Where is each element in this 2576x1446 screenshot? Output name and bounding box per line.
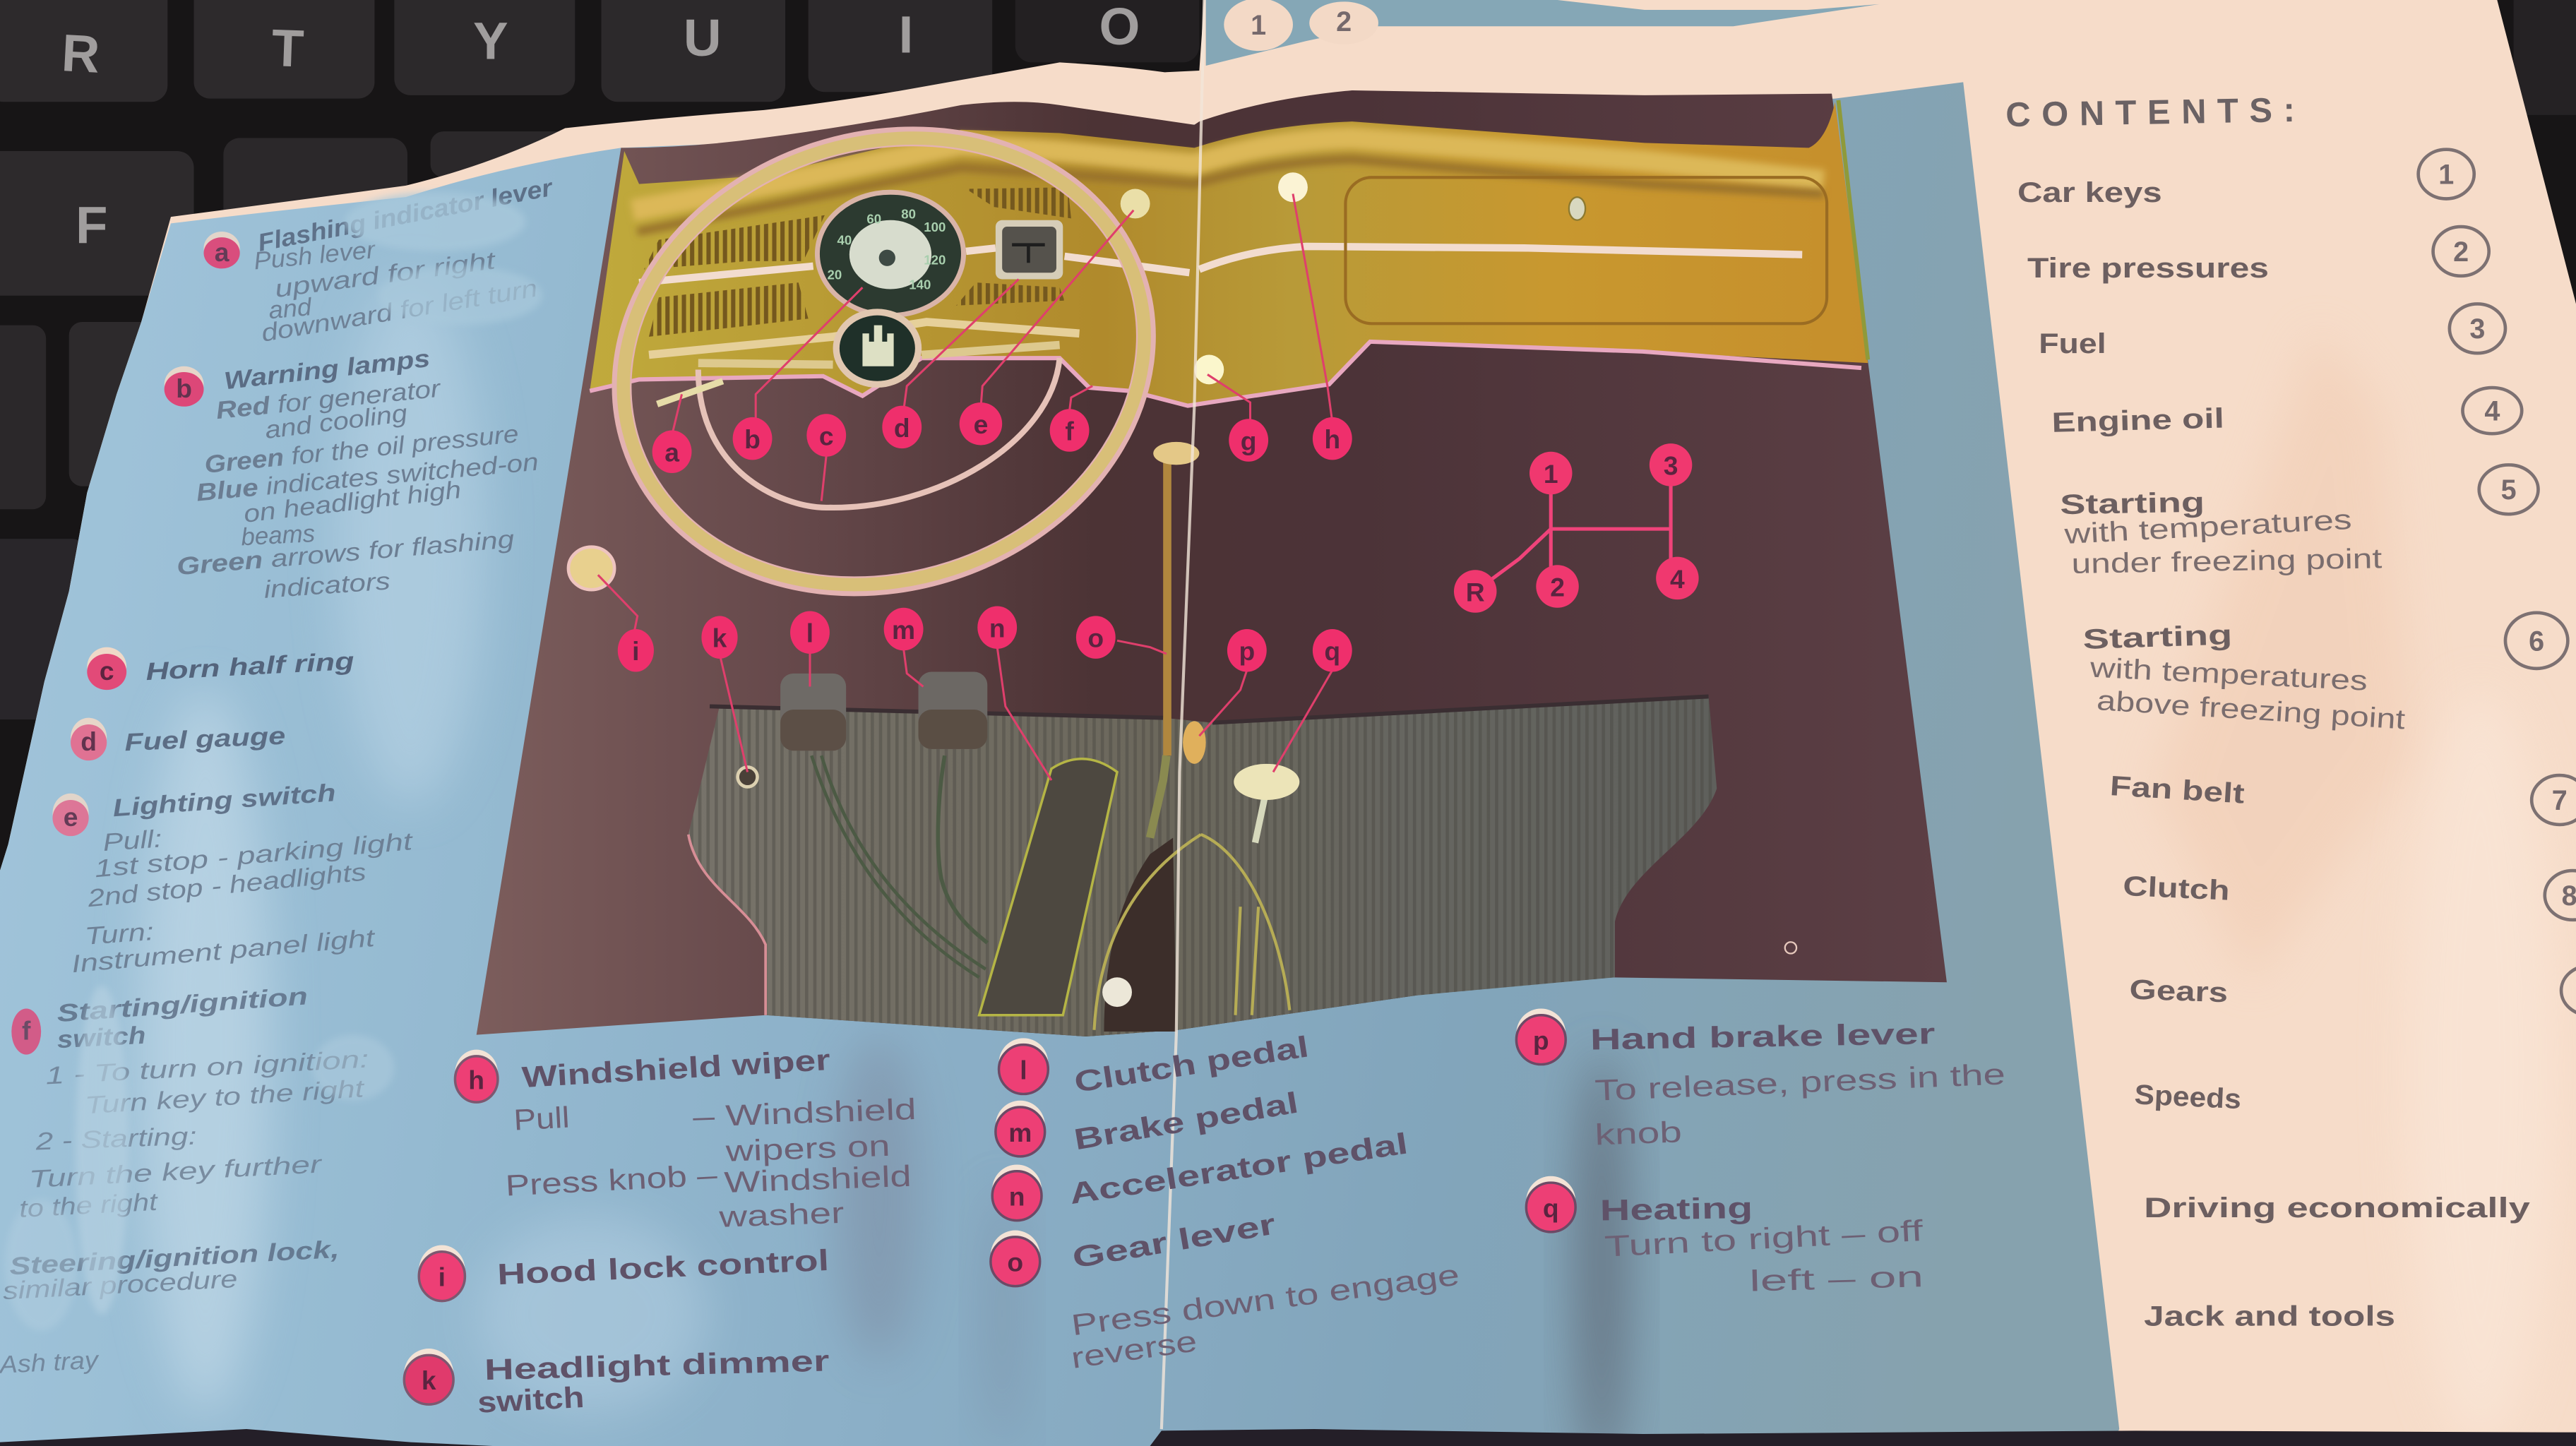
legend f: starting ignition switch: similar procedure <box>2 1265 238 1305</box>
item: fan belt <box>2109 770 2576 825</box>
legend m: brake pedal: Brake pedal <box>1072 1086 1301 1156</box>
top tab with page markers: 2 <box>1336 6 1352 37</box>
legend o: gear lever <box>991 1207 1461 1375</box>
item: starting under freezing: Starting <box>2060 487 2205 520</box>
callout markers on the diagram: i <box>632 636 640 666</box>
legend o: gear lever: reverse <box>1069 1324 1199 1375</box>
item: car keys: Car keys <box>2017 177 2162 208</box>
legend l: clutch pedal: Clutch pedal <box>1072 1029 1311 1099</box>
legend i: hood lock control: i <box>439 1262 446 1292</box>
ignition knob <box>1194 355 1224 384</box>
edge line <box>1838 100 1868 359</box>
legend p: hand brake lever: knob <box>1594 1115 1683 1152</box>
panel: left legend a to g <box>0 174 556 1379</box>
panel: lower legend p and q <box>1516 1008 2006 1298</box>
legend k: headlight dimmer switch <box>404 1344 830 1419</box>
legend b: warning lamps: on headlight high <box>242 476 463 528</box>
legend n: accelerator pedal: n <box>1009 1182 1025 1212</box>
hand brake <box>1094 721 1289 1030</box>
mat stud <box>738 767 758 787</box>
paper fold line <box>1162 0 1204 1429</box>
item: starting under freezing <box>2060 465 2538 580</box>
keyboard background: F <box>76 196 108 254</box>
keyboard background: U <box>684 8 722 67</box>
panel: lower legend h to k <box>404 1043 917 1419</box>
callout markers on the diagram: g <box>1241 426 1257 455</box>
panel: contents <box>2005 91 2576 1332</box>
item: engine oil <box>2051 388 2522 438</box>
item: tire pressures <box>2027 227 2489 284</box>
item: starting under freezing: under freezing point <box>2071 543 2383 580</box>
callout markers on the diagram: o <box>1087 623 1104 653</box>
item: starting above freezing: Starting <box>2082 619 2233 655</box>
speedometer: 80 <box>901 206 916 221</box>
dashboard upper dark band <box>638 160 1823 232</box>
legend b: warning lamps <box>165 345 539 604</box>
legend b: warning lamps: Green arrows for flashing <box>176 525 515 580</box>
legend h: windshield wiper: Pull <box>513 1101 571 1137</box>
callout markers on the diagram: b <box>744 424 761 454</box>
callout markers on the diagram: e <box>974 410 988 439</box>
legend n: accelerator pedal <box>992 1126 1410 1221</box>
legend h: windshield wiper <box>455 1043 917 1233</box>
legend p: hand brake lever: Hand brake lever <box>1590 1017 1936 1056</box>
item: clutch <box>2122 871 2576 920</box>
speedometer: 100 <box>924 220 946 234</box>
clutch pedal <box>780 674 986 977</box>
legend b: warning lamps: and cooling <box>263 400 409 444</box>
legend q: heating: q <box>1543 1193 1559 1223</box>
legend a: flashing indicator: Push lever <box>253 236 377 275</box>
item: engine oil: Engine oil <box>2051 402 2224 438</box>
legend a: flashing indicator: and <box>268 293 314 324</box>
legend b: warning lamps: indicators <box>263 567 391 604</box>
speedometer: 40 <box>837 233 852 248</box>
gas pedal stem highlight <box>1102 977 1132 1007</box>
item: gears: Gears <box>2129 974 2229 1008</box>
item: car keys: 1 <box>2438 160 2454 191</box>
legend d: fuel gauge: Fuel gauge <box>124 722 286 756</box>
callout markers on the diagram: l <box>806 619 813 648</box>
item: fan belt: 7 <box>2552 785 2568 816</box>
callout markers on the diagram: m <box>892 615 915 645</box>
gear shift diagram: 2 <box>1550 573 1565 602</box>
legend p: hand brake lever: To release, press in the <box>1594 1057 2006 1107</box>
speedometer: 140 <box>909 277 931 292</box>
gear shift diagram: 4 <box>1670 564 1685 594</box>
heater knob <box>1234 764 1299 842</box>
chrome dash strip <box>639 246 1802 282</box>
legend h: windshield wiper: h <box>468 1065 484 1094</box>
accelerator pedal <box>979 759 1117 1015</box>
contents heading: CONTENTS: <box>2005 91 2295 134</box>
legend n: accelerator pedal: Accelerator pedal <box>1067 1126 1410 1210</box>
legend f: starting ignition switch: f <box>22 1016 31 1046</box>
legend c: horn half ring: c <box>100 656 114 686</box>
item: starting under freezing: with temperatures <box>2063 504 2353 550</box>
legend k: headlight dimmer switch: k <box>422 1366 436 1395</box>
legend h: windshield wiper: wipers on <box>724 1129 890 1168</box>
legend f: starting ignition switch: to the right <box>18 1188 159 1223</box>
legend q: heating <box>1526 1176 1924 1298</box>
legend e: lighting switch: Pull: <box>102 825 163 856</box>
legend h: windshield wiper: – Windshield <box>692 1092 917 1133</box>
legend f: starting ignition switch: 1 - To turn on ignition: <box>45 1046 369 1089</box>
steering wheel rim <box>565 72 1203 651</box>
floor stud right <box>1785 942 1796 954</box>
item: fan belt: Fan belt <box>2109 770 2246 810</box>
speaker grille: right upper <box>966 187 1071 218</box>
legend p: hand brake lever: p <box>1533 1026 1549 1056</box>
gear shift diagram <box>1454 443 1699 613</box>
legend a: flashing indicator: upward for right <box>273 246 498 303</box>
legend b: warning lamps: Red for generator <box>215 375 443 424</box>
speaker grille: left lower <box>649 282 809 337</box>
legend b: warning lamps: b <box>176 374 192 403</box>
legend i: hood lock control <box>419 1243 830 1301</box>
legend f: starting ignition switch: 2 - Starting: <box>35 1123 197 1156</box>
legend k: headlight dimmer switch: switch <box>477 1380 585 1419</box>
panel: lower legend l to o <box>991 1029 1461 1375</box>
item: fuel <box>2039 304 2505 359</box>
callout markers on the diagram: q <box>1324 636 1340 666</box>
keyboard background: I <box>899 5 913 64</box>
legend h: windshield wiper: Windshield <box>724 1159 912 1199</box>
dashboard upper light band <box>633 138 1823 210</box>
legend f: starting ignition switch: Turn the key further <box>28 1150 323 1193</box>
legend c: horn half ring: Horn half ring <box>145 647 355 686</box>
spokes and horn bar <box>698 345 1060 364</box>
legend e: lighting switch: 2nd stop - headlights <box>85 858 367 912</box>
callout markers on the diagram: d <box>894 413 910 443</box>
gear shift diagram: 3 <box>1664 450 1678 480</box>
horn half ring <box>698 358 1060 508</box>
item: jack and tools: Jack and tools <box>2144 1301 2395 1332</box>
speedometer: 120 <box>924 253 946 268</box>
item: starting above freezing <box>2082 613 2568 735</box>
keyboard background: Y <box>473 12 508 71</box>
leader lines <box>598 194 1332 780</box>
callout markers on the diagram: c <box>819 421 834 450</box>
legend c: horn half ring <box>87 647 355 690</box>
speaker grille: right lower <box>956 282 1065 306</box>
glove box knob <box>1569 197 1585 220</box>
legend a: flashing indicator: downward for left turn <box>259 275 539 347</box>
keyboard background: T <box>270 18 305 78</box>
legend a: flashing indicator <box>203 174 556 347</box>
legend l: clutch pedal <box>999 1029 1311 1099</box>
legend f: starting ignition switch: Turn key to the right <box>84 1075 366 1119</box>
legend b: warning lamps: Blue indicates switched-on <box>195 448 539 507</box>
gear shift diagram: R <box>1466 577 1485 607</box>
lighting switch knob <box>1121 189 1150 218</box>
speedometer: 20 <box>828 268 842 282</box>
legend e: lighting switch <box>52 779 415 978</box>
item: starting above freezing: with temperatures <box>2089 652 2368 697</box>
legend q: heating: Heating <box>1599 1191 1753 1227</box>
legend e: lighting switch: e <box>64 802 78 832</box>
gear lever <box>1150 442 1199 838</box>
legend f: starting ignition switch: Steering/ignition lock, <box>8 1236 340 1280</box>
horn cap <box>833 309 922 388</box>
dark surface below the paper <box>0 1429 2576 1446</box>
worn print patches over the left legend <box>5 192 542 1330</box>
dashboard illustration <box>477 70 1947 1036</box>
center tunnel <box>1104 838 1176 1032</box>
legend o: gear lever: o <box>1007 1248 1023 1277</box>
item: driving economically: Driving economically <box>2144 1193 2530 1224</box>
item: car keys <box>2017 150 2474 208</box>
legend i: hood lock control: Hood lock control <box>496 1243 830 1291</box>
item: engine oil: 4 <box>2484 396 2500 427</box>
callout markers on the diagram: p <box>1239 636 1255 666</box>
legend m: brake pedal: m <box>1008 1118 1032 1147</box>
floor mat <box>688 696 1717 1036</box>
item: tire pressures: 2 <box>2453 237 2469 268</box>
legend e: lighting switch: Turn: <box>84 918 155 950</box>
legend h: windshield wiper: Windshield wiper <box>521 1043 831 1094</box>
legend f: starting ignition switch: Starting/ignition <box>56 982 309 1027</box>
windshield wiper knob <box>1278 172 1308 202</box>
legend b: warning lamps: Green for the oil pressure <box>203 420 520 479</box>
top tab with page markers <box>1206 0 1880 66</box>
dashboard lower edge trim <box>590 342 1861 406</box>
legend d: fuel gauge: d <box>80 727 97 756</box>
legend a: flashing indicator: Flashing indicator lever <box>256 174 556 257</box>
legend b: warning lamps: Warning lamps <box>222 345 431 395</box>
panel: blue controls sheet <box>0 82 2119 1446</box>
legend h: windshield wiper: washer <box>717 1196 845 1233</box>
legend f: starting ignition switch <box>0 982 369 1379</box>
speedometer: 60 <box>866 211 881 226</box>
legend e: lighting switch: 1st stop - parking light <box>93 827 415 883</box>
legend o: gear lever: Gear lever <box>1070 1207 1278 1274</box>
callout markers on the diagram <box>618 402 1352 672</box>
interior brown background <box>477 90 1947 1036</box>
hood lock knob <box>568 547 614 590</box>
top tab with page markers: 1 <box>1251 10 1266 41</box>
warning lamp cluster <box>996 220 1063 280</box>
legend l: clutch pedal: l <box>1020 1055 1027 1084</box>
keyboard background: R <box>60 23 101 84</box>
dash lower cushion band <box>649 322 1080 355</box>
indicator stalk <box>657 381 723 404</box>
item: starting above freezing: 6 <box>2529 626 2544 657</box>
legend b: warning lamps: beams <box>240 520 316 551</box>
legend e: lighting switch: Instrument panel light <box>71 924 377 978</box>
paper light and shadow patches <box>140 280 2555 1446</box>
callout markers on the diagram: f <box>1065 416 1074 446</box>
brake pedal <box>919 672 987 943</box>
callout markers on the diagram: h <box>1324 424 1340 454</box>
gear shift diagram: 1 <box>1544 459 1558 489</box>
item: speeds: Speeds <box>2134 1079 2242 1115</box>
legend q: heating: Turn to right – off <box>1604 1214 1924 1263</box>
item: tire pressures: Tire pressures <box>2027 253 2269 284</box>
legend f: starting ignition switch: switch <box>56 1022 146 1053</box>
item: clutch: Clutch <box>2122 871 2231 907</box>
legend h: windshield wiper: Press knob – <box>505 1158 719 1202</box>
legend k: headlight dimmer switch: Headlight dimmer <box>484 1344 830 1386</box>
legend d: fuel gauge <box>71 718 286 760</box>
item: gears <box>2129 966 2576 1015</box>
legend o: gear lever: Press down to engage <box>1069 1257 1461 1342</box>
legend p: hand brake lever <box>1516 1008 2006 1152</box>
dashboard gold panel <box>590 102 1868 406</box>
legend a: flashing indicator: a <box>215 237 229 267</box>
speedometer <box>815 190 966 318</box>
legend q: heating: left – on <box>1749 1260 1924 1298</box>
callout markers on the diagram: k <box>712 623 727 653</box>
item: fuel: 3 <box>2469 313 2485 345</box>
legend m: brake pedal <box>996 1086 1301 1157</box>
glove box <box>1345 177 1827 323</box>
item: starting above freezing: above freezing point <box>2096 685 2406 735</box>
item: starting under freezing: 5 <box>2501 474 2517 506</box>
steering wheel rim outline <box>563 70 1205 653</box>
callout markers on the diagram: n <box>989 614 1006 643</box>
legend e: lighting switch: Lighting switch <box>112 779 337 822</box>
callout markers on the diagram: a <box>664 438 679 467</box>
speaker grille: left upper <box>644 215 825 270</box>
legend f: starting ignition switch: Ash tray <box>0 1346 101 1379</box>
item: fuel: Fuel <box>2039 328 2106 359</box>
